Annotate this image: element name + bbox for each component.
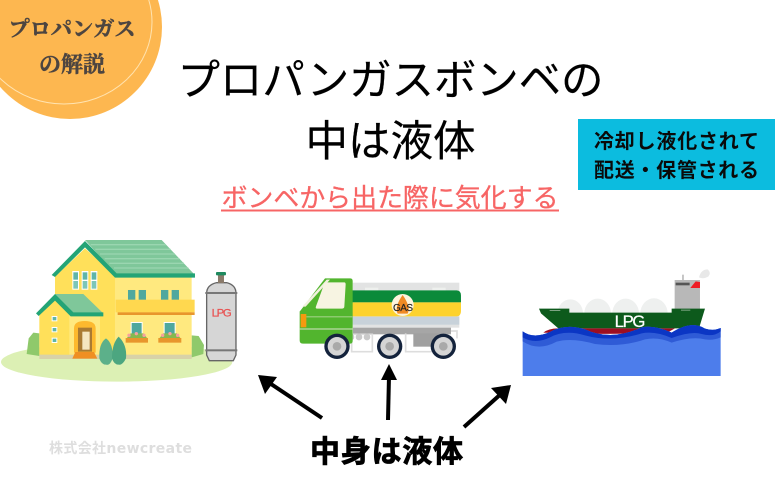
illustration: tanker truck <box>300 278 461 359</box>
badge: プロパンガスの解説: プロパンガス <box>8 17 136 41</box>
illustration: LPG tanker ship on waves <box>523 269 721 376</box>
label: 中身は液体: 中身は液体 <box>310 436 463 469</box>
arrow: to truck <box>381 364 397 420</box>
callout: 冷却し液化されて配送・保管される <box>578 119 775 190</box>
illustration: house with LPG cylinder: LPG <box>212 308 232 320</box>
badge: プロパンガスの解説: の解説 <box>39 52 105 77</box>
arrow: to house <box>258 375 322 418</box>
callout: 冷却し液化されて配送・保管される: 配送・保管される <box>594 159 759 182</box>
title: プロパンガスボンベの <box>178 58 604 105</box>
illustration: tanker truck: GAS <box>393 303 413 314</box>
illustration: house with LPG cylinder <box>1 240 237 382</box>
illustration: LPG tanker ship on waves: LPG <box>615 312 645 331</box>
title: 中は液体 <box>305 119 476 166</box>
watermark: 株式会社newcreate <box>49 440 192 457</box>
subtitle: ボンベから出た際に気化する <box>222 183 558 213</box>
arrow: to ship <box>464 385 511 427</box>
title <box>178 58 604 166</box>
callout: 冷却し液化されて配送・保管される: 冷却し液化されて <box>594 130 759 153</box>
badge: プロパンガスの解説 <box>0 0 162 119</box>
